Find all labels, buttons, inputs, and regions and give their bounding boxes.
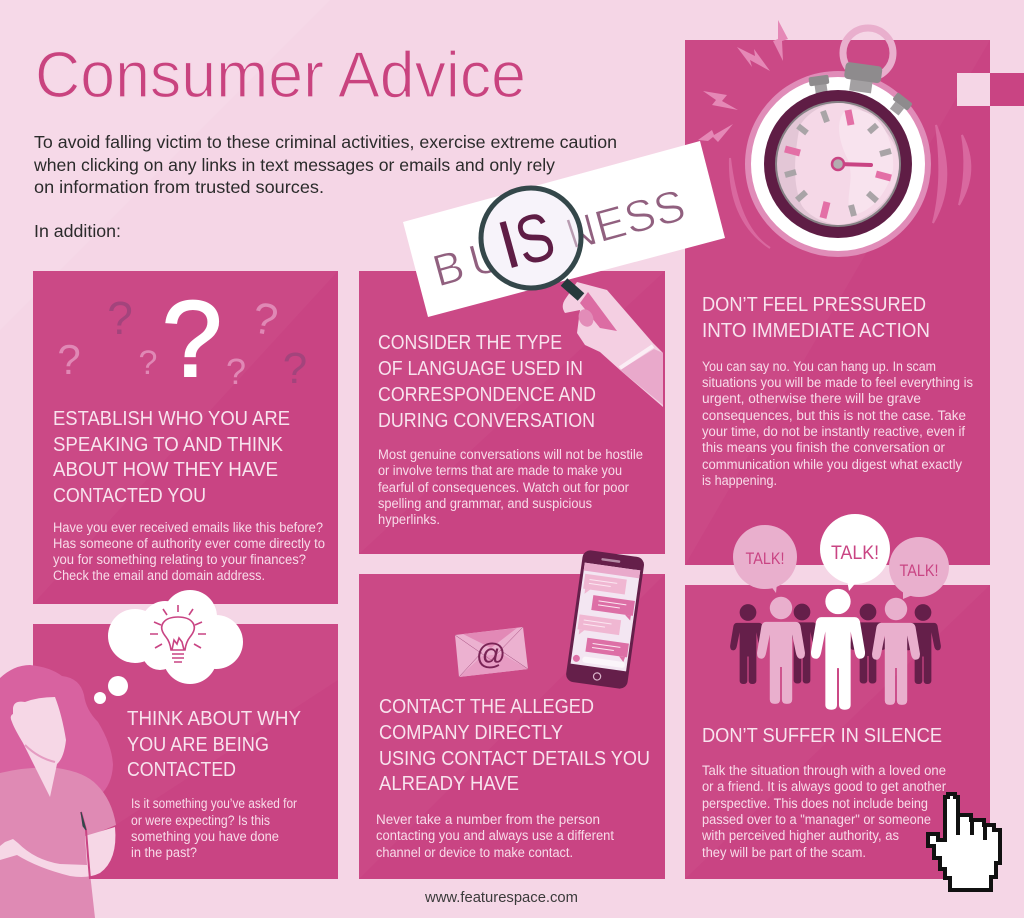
speech bubble: centre: TALK! — [831, 543, 879, 564]
body text: perspective. This does not include being — [702, 796, 928, 811]
body text: Has someone of authority ever come directly to — [53, 536, 325, 551]
body text: You can say no. You can hang up. In scam — [702, 359, 936, 374]
heading: ALREADY HAVE — [379, 772, 519, 795]
icon: hand holding magnifier: S — [508, 197, 562, 280]
icon: pixel hand cursor — [928, 794, 1000, 890]
body text: passed over to a "manager" or someone — [702, 812, 931, 827]
icon: stopwatch — [698, 20, 970, 257]
icon: question marks: ? — [249, 293, 281, 346]
body text — [378, 447, 643, 527]
body text: they will be part of the scam. — [702, 845, 866, 860]
body text: or were expecting? Is this — [131, 813, 270, 828]
speech bubble: centre — [820, 514, 890, 591]
heading: CONTACTED YOU — [53, 484, 206, 507]
body text — [376, 812, 614, 860]
body text: Is it something you’ve asked for — [131, 796, 297, 811]
intro text: when clicking on any links in text messages or emails and only rely — [33, 155, 555, 175]
panel: don't suffer in silence — [685, 514, 1000, 890]
illustration: misspelt business note: NESS — [557, 179, 690, 261]
icon: hand holding magnifier — [481, 188, 663, 407]
body text — [702, 359, 973, 488]
panel: think about why — [0, 590, 338, 918]
heading: YOU ARE BEING — [127, 733, 269, 756]
body text: contacting you and always use a different — [376, 828, 614, 843]
body text: is happening. — [702, 473, 777, 488]
heading: SPEAKING TO AND THINK — [53, 433, 283, 456]
body text: Have you ever received emails like this before? — [53, 520, 323, 535]
panel: don't feel pressured — [685, 20, 1024, 565]
heading: DURING CONVERSATION — [378, 409, 595, 432]
white figure — [811, 589, 865, 710]
heading: ABOUT HOW THEY HAVE — [53, 458, 278, 481]
icon: question marks: ? — [162, 278, 222, 399]
heading: OF LANGUAGE USED IN — [378, 357, 583, 380]
dark figures — [730, 604, 941, 684]
body text — [53, 520, 325, 583]
icon: smartphone with chat — [565, 549, 645, 690]
icon: envelope with at sign: @ — [476, 638, 506, 671]
body text: or a friend. It is always good to get another — [702, 779, 947, 794]
panel: contact the alleged company — [359, 549, 665, 879]
body text: fearful of consequences. Watch out for poor — [378, 480, 630, 495]
heading: ESTABLISH WHO YOU ARE — [53, 407, 290, 430]
decorative squares — [957, 73, 1024, 106]
icon: thought bubble with light bulb — [94, 590, 243, 704]
heading: COMPANY DIRECTLY — [379, 721, 563, 744]
icon: question marks — [57, 278, 307, 399]
heading: CONTACTED — [127, 758, 236, 781]
body text — [131, 796, 297, 860]
body text: Most genuine conversations will not be hostile — [378, 447, 643, 462]
body text: urgent, otherwise there will be grave — [702, 391, 921, 406]
body text: Talk the situation through with a loved one — [702, 763, 946, 778]
intro text — [33, 132, 617, 241]
speech bubble: left — [733, 525, 797, 593]
body text: Never take a number from the person — [376, 812, 600, 827]
heading — [127, 707, 301, 781]
intro text: In addition: — [34, 221, 121, 241]
heading — [53, 407, 290, 507]
speech bubble: right — [889, 537, 949, 599]
body text: channel or device to make contact. — [376, 845, 573, 860]
heading: INTO IMMEDIATE ACTION — [702, 319, 930, 342]
footer url: www.featurespace.com — [424, 890, 578, 906]
heading: DON’T SUFFER IN SILENCE — [702, 724, 942, 747]
icon: question marks: ? — [226, 351, 246, 392]
icon: question marks: ? — [283, 344, 307, 393]
illustration: misspelt business note — [403, 141, 725, 317]
title: Consumer Advice — [35, 38, 526, 111]
panel: establish who you are speaking to — [33, 271, 338, 604]
heading — [378, 331, 596, 432]
illustration: thinking woman — [0, 665, 116, 918]
body text: consequences, but this is not the case. Take — [702, 408, 966, 423]
heading: USING CONTACT DETAILS YOU — [379, 747, 650, 770]
body text: something you have done — [131, 829, 279, 844]
heading: CONSIDER THE TYPE — [378, 331, 562, 354]
body text: hyperlinks. — [378, 512, 440, 527]
body text: spelling and grammar, and suspicious — [378, 496, 592, 511]
heading — [379, 695, 650, 795]
speech bubble: left: TALK! — [746, 549, 784, 568]
intro text: To avoid falling victim to these criminal activities, exercise extreme caution — [34, 132, 617, 152]
light figures — [757, 597, 920, 705]
icon: envelope with at sign — [455, 627, 528, 677]
heading: CORRESPONDENCE AND — [378, 383, 596, 406]
icon: question marks: ? — [107, 292, 133, 344]
body text: situations you will be made to feel everything is — [702, 375, 973, 390]
icon: question marks: ? — [57, 336, 81, 383]
speech bubble: right: TALK! — [900, 561, 938, 580]
body text: your time, do not be instantly reactive, even if — [702, 424, 965, 439]
illustration: misspelt business note: BU — [427, 229, 508, 297]
heading: THINK ABOUT WHY — [127, 707, 301, 730]
heading — [702, 293, 930, 342]
illustration: talking people — [730, 514, 949, 710]
icon: hand holding magnifier: I — [490, 206, 528, 284]
body text: you for something relating to your finances? — [53, 552, 306, 567]
panel: consider the type of language — [359, 141, 725, 554]
body text: this means you finish the conversation or — [702, 440, 946, 455]
intro text: on information from trusted sources. — [34, 177, 324, 197]
body text: communication while you digest what exactly — [702, 457, 962, 472]
heading: CONTACT THE ALLEGED — [379, 695, 594, 718]
body text: in the past? — [131, 845, 197, 860]
body text: with perceived higher authority, as — [701, 828, 899, 843]
body text: Check the email and domain address. — [53, 568, 265, 583]
heading: DON’T FEEL PRESSURED — [702, 293, 926, 316]
body text: or involve terms that are made to make you — [378, 463, 622, 478]
icon: question marks: ? — [139, 344, 157, 382]
body text — [701, 763, 947, 860]
